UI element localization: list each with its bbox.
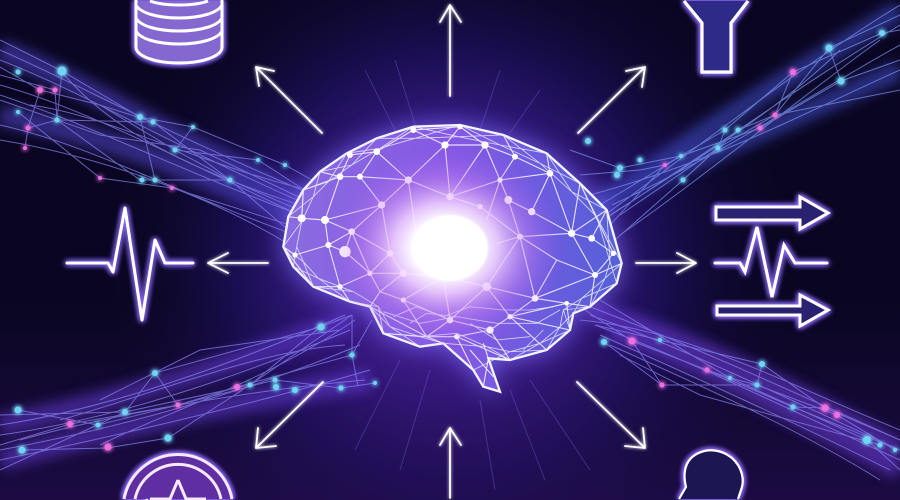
icon: database stack [136, 0, 222, 63]
brain rim mesh [283, 125, 622, 370]
arrow: up [440, 5, 461, 96]
brain silhouette [283, 125, 622, 392]
center pulse [715, 227, 827, 297]
brain glow [283, 125, 622, 392]
network strands: bottom right [580, 300, 900, 480]
icon: funnel [684, 1, 748, 72]
brain mesh nodes [292, 124, 616, 339]
icon: data streams and pulse [715, 197, 828, 326]
icon: human head [679, 450, 743, 499]
network strands: top left [0, 40, 330, 245]
glowing brain core [328, 148, 564, 348]
arrow: bottom up [440, 428, 461, 498]
network strands: top right [570, 5, 900, 240]
upper arrow [716, 197, 828, 229]
arrow: up right [578, 67, 645, 133]
arrow: right [636, 253, 696, 273]
lower arrow [717, 295, 828, 326]
network strands: bottom left [0, 315, 375, 470]
icon: heartbeat pulse [67, 208, 193, 320]
brain mesh [283, 127, 622, 387]
arrow: up left [256, 67, 322, 133]
icon: star badge [124, 454, 232, 500]
arrow: down right [577, 382, 645, 448]
brain [283, 124, 622, 392]
light rays from brain [355, 60, 590, 490]
arrow: left [208, 253, 268, 273]
arrow: down left [256, 382, 323, 448]
